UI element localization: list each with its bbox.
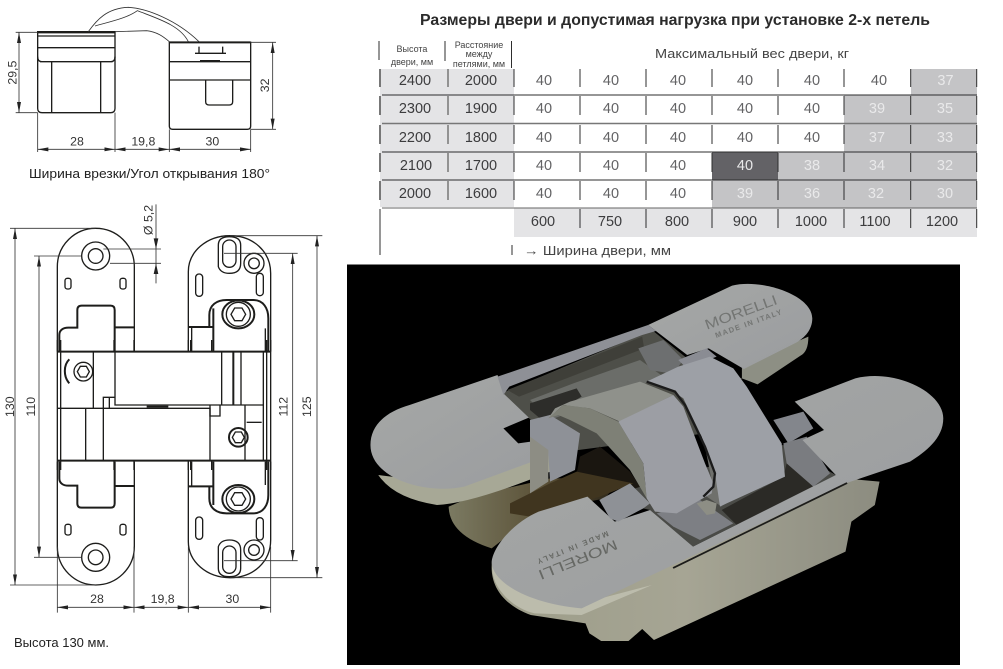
back hinge lower parts (370, 284, 812, 548)
photo panel: Morelli hidden hinge on black (347, 264, 960, 665)
weight values: 35 (937, 101, 953, 117)
door width values: 800 (665, 214, 689, 230)
weight values: 40 (804, 73, 820, 89)
row labels: 2000 (399, 186, 431, 202)
dimension diameter 5,2 (103, 204, 161, 283)
weight values: 40 (670, 158, 686, 174)
engraving: back leaf: MORELLI (702, 291, 779, 333)
weight values: 40 (871, 73, 887, 89)
engraving: front leaf: MADE IN ITALY (536, 529, 610, 566)
row labels: 1900 (465, 101, 497, 117)
lower hinge end (57, 462, 271, 585)
dimension 130: 130 (3, 396, 17, 417)
weight values: 40 (536, 158, 552, 174)
front interior (657, 437, 830, 540)
column header: door height: двери, мм (391, 57, 433, 67)
door width values (531, 214, 958, 230)
right leaf side profile (169, 42, 251, 129)
table title: Размеры двери и допустимая нагрузка при установке 2-х петель (420, 12, 930, 29)
weight values (536, 73, 954, 202)
widths 28, 19,8, 30 (38, 113, 251, 152)
dimension 110 (24, 256, 82, 557)
diagram: front view of hinge with dimensions (3, 204, 322, 613)
weight values: 38 (804, 158, 820, 174)
dimension 32: 32 (258, 78, 272, 92)
front hinge cover plate (492, 376, 943, 608)
caption: mortise width: Ширина врезки/Угол открывания 180° (29, 166, 270, 181)
weight values: 33 (937, 130, 953, 146)
dimension 112: 112 (277, 397, 291, 416)
weight values: 40 (670, 101, 686, 117)
door width values: 600 (531, 214, 555, 230)
weight values: 32 (868, 186, 884, 202)
row labels: 2000 (465, 73, 497, 89)
engraving: front leaf (532, 528, 620, 583)
weight values: 32 (937, 158, 953, 174)
door swing curves (88, 7, 199, 42)
weight values: 40 (737, 158, 753, 174)
weight values: 39 (737, 186, 753, 202)
engraving: front leaf: MORELLI (536, 537, 620, 583)
dimension 32 (251, 42, 276, 129)
engraving: back leaf: MADE IN ITALY (714, 307, 783, 340)
door width values: 1200 (926, 214, 958, 230)
bottom widths 28, 19,8, 30: 28 (90, 592, 104, 606)
column header: distance between hinges: петлями, мм (453, 59, 505, 69)
front hinge base and plate (492, 445, 880, 641)
row labels: 1800 (465, 130, 497, 146)
weight values: 40 (536, 130, 552, 146)
door width values: 750 (598, 214, 622, 230)
dimension 125 (230, 236, 322, 578)
weight values: 40 (670, 130, 686, 146)
weight values: 40 (804, 101, 820, 117)
row labels (399, 73, 497, 202)
weight values: 40 (737, 101, 753, 117)
weight values: 40 (603, 101, 619, 117)
row labels: 2300 (399, 101, 431, 117)
weight values: 40 (737, 73, 753, 89)
weight values: 40 (536, 186, 552, 202)
widths 28, 19,8, 30: 28 (70, 135, 84, 149)
left leaf side profile (38, 32, 115, 113)
table: door size and load (379, 40, 977, 258)
dimension diameter 5,2: Ø 5,2 (141, 205, 155, 235)
dimension 29,5: 29,5 (5, 61, 19, 85)
weight values: 40 (536, 73, 552, 89)
caption: height: Высота 130 мм. (14, 635, 109, 650)
column header: distance between hinges: Расстояние (455, 40, 503, 50)
row labels: 1600 (465, 186, 497, 202)
bottom widths 28, 19,8, 30: 19,8 (151, 592, 175, 606)
centre interior behind arms (510, 340, 813, 517)
weight values: 40 (536, 101, 552, 117)
door width values: 1100 (859, 214, 891, 230)
weight values: 40 (804, 130, 820, 146)
column header: max door weight: Максимальный вес двери, кг (655, 46, 849, 61)
column header: distance between hinges: между (466, 49, 493, 59)
widths 28, 19,8, 30: 30 (205, 135, 219, 149)
dimension 125: 125 (300, 396, 314, 417)
door width values: 1000 (795, 214, 827, 230)
upper hinge end (57, 228, 271, 352)
weight values: 37 (937, 73, 954, 89)
column header: door height: Высота (397, 44, 427, 54)
weight values: 37 (869, 130, 885, 146)
arms and links (548, 348, 785, 522)
table shading (380, 69, 977, 237)
bottom widths 28, 19,8, 30: 30 (225, 592, 239, 606)
weight values: 34 (869, 158, 885, 174)
widths 28, 19,8, 30: 19,8 (131, 135, 155, 149)
weight values: 40 (603, 158, 619, 174)
weight values: 40 (603, 73, 619, 89)
row labels: 2100 (400, 158, 432, 174)
row labels: 1700 (465, 158, 497, 174)
row labels: 2400 (399, 73, 431, 89)
door width values: 900 (733, 214, 757, 230)
row labels: 2200 (399, 130, 431, 146)
weight values: 36 (804, 186, 820, 202)
diagram: side profile of hinge with mortise widths (5, 7, 276, 152)
engraving: back leaf (702, 291, 783, 342)
weight values: 40 (603, 186, 619, 202)
central knuckle (57, 340, 271, 470)
dimension 29,5 (5, 32, 38, 113)
table grid lines (379, 41, 977, 255)
axis label: door width: → Ширина двери, мм (524, 243, 671, 258)
bottom widths 28, 19,8, 30 (57, 547, 271, 613)
dimension 130 (3, 228, 96, 585)
weight values: 40 (603, 130, 619, 146)
weight values: 40 (670, 186, 686, 202)
dimension 110: 110 (24, 397, 38, 416)
weight values: 40 (737, 130, 753, 146)
weight values: 30 (937, 186, 953, 202)
dimension 112 (224, 253, 298, 561)
weight values: 39 (869, 101, 885, 117)
weight values: 40 (670, 73, 686, 89)
